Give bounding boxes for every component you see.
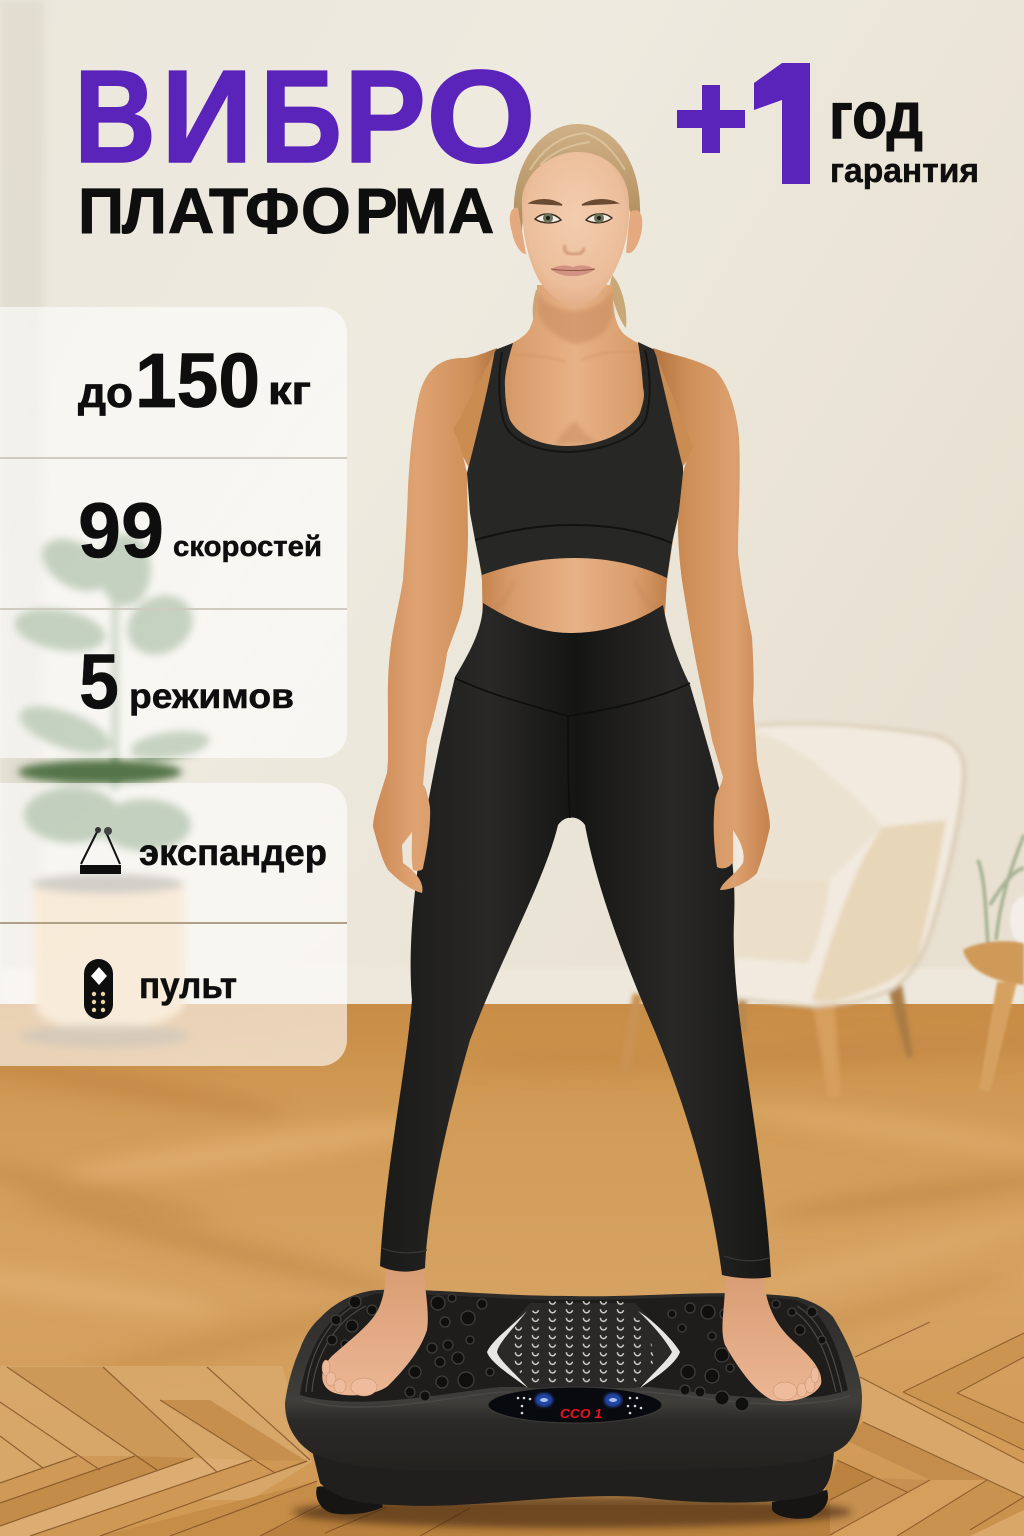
word: platform: ПЛАТФОРМА bbox=[78, 175, 494, 247]
text: speeds: скоростей bbox=[173, 531, 322, 563]
contour lines bbox=[303, 1303, 850, 1407]
collarbones bbox=[515, 351, 637, 362]
eyes bbox=[535, 213, 612, 223]
panel background bbox=[0, 307, 347, 758]
text: load capacity: кг bbox=[268, 369, 311, 413]
blurred floor streaks bbox=[0, 1066, 1024, 1366]
text: modes bbox=[79, 637, 294, 725]
title: product name bbox=[74, 43, 536, 247]
ears bbox=[510, 208, 642, 254]
feet bbox=[322, 1262, 821, 1401]
side table with plant bbox=[963, 835, 1024, 1092]
sports bra bbox=[467, 342, 683, 578]
left foot bbox=[322, 1262, 428, 1396]
lips bbox=[551, 265, 595, 276]
midriff shading bbox=[492, 580, 658, 610]
display panel bbox=[488, 1387, 662, 1423]
woman bbox=[322, 124, 821, 1401]
nose bbox=[564, 245, 584, 254]
background plant and pot bbox=[11, 528, 211, 1048]
icon: expander bbox=[80, 827, 121, 874]
text: load capacity: 150 bbox=[135, 338, 260, 424]
cleavage shading bbox=[555, 420, 600, 445]
neck and torso skin bbox=[467, 285, 683, 645]
head bbox=[510, 124, 642, 306]
vibration platform bbox=[285, 1290, 862, 1519]
platform top surface bbox=[300, 1294, 848, 1402]
text: speeds: 99 bbox=[78, 486, 164, 574]
eyebrows bbox=[530, 200, 617, 205]
warranty badge bbox=[677, 63, 979, 190]
platform base bbox=[312, 1450, 834, 1506]
word: vibro: Р bbox=[344, 43, 426, 190]
word: vibro: О bbox=[426, 43, 536, 190]
platform shell bbox=[285, 1290, 862, 1471]
left arm bbox=[373, 348, 497, 893]
text: load capacity: до bbox=[78, 369, 133, 417]
right arm bbox=[653, 348, 770, 890]
text: modes: 5 bbox=[79, 637, 119, 725]
hair bbox=[514, 124, 640, 232]
platform feet bbox=[316, 1486, 828, 1519]
text: warranty: гарантия bbox=[830, 152, 979, 190]
display panel: CCO 1 bbox=[560, 1406, 602, 1421]
panel background bbox=[0, 783, 347, 1066]
parquet left bbox=[0, 1366, 835, 1536]
ponytail and hair back bbox=[533, 275, 626, 328]
center pad bbox=[490, 1303, 676, 1388]
right foot bbox=[722, 1268, 821, 1401]
panel: accessories bbox=[0, 783, 347, 1066]
text: load capacity bbox=[78, 338, 311, 424]
floor shadow under platform bbox=[292, 1496, 852, 1528]
text: expander: экспандер bbox=[139, 832, 327, 873]
word: vibro: В bbox=[74, 43, 156, 190]
text: year: год bbox=[829, 78, 923, 152]
neck shadow bbox=[537, 290, 613, 344]
panel: specs bbox=[0, 307, 347, 758]
text: remote: пульт bbox=[139, 965, 237, 1006]
massage bumps bbox=[327, 1294, 826, 1411]
text: modes: режимов bbox=[129, 677, 294, 716]
back skin behind straps bbox=[450, 348, 696, 470]
leggings bbox=[380, 603, 771, 1278]
word: vibro: Б bbox=[260, 43, 342, 190]
word: vibro bbox=[74, 43, 536, 190]
plus sign bbox=[677, 85, 745, 153]
face bbox=[522, 152, 629, 306]
number one bbox=[754, 63, 810, 184]
parquet right bbox=[825, 1322, 1024, 1536]
icon: remote bbox=[84, 959, 113, 1019]
armchair bbox=[620, 722, 966, 1097]
word: vibro: И bbox=[161, 43, 253, 190]
text: speeds bbox=[78, 486, 322, 574]
chrome accents bbox=[487, 1311, 528, 1388]
